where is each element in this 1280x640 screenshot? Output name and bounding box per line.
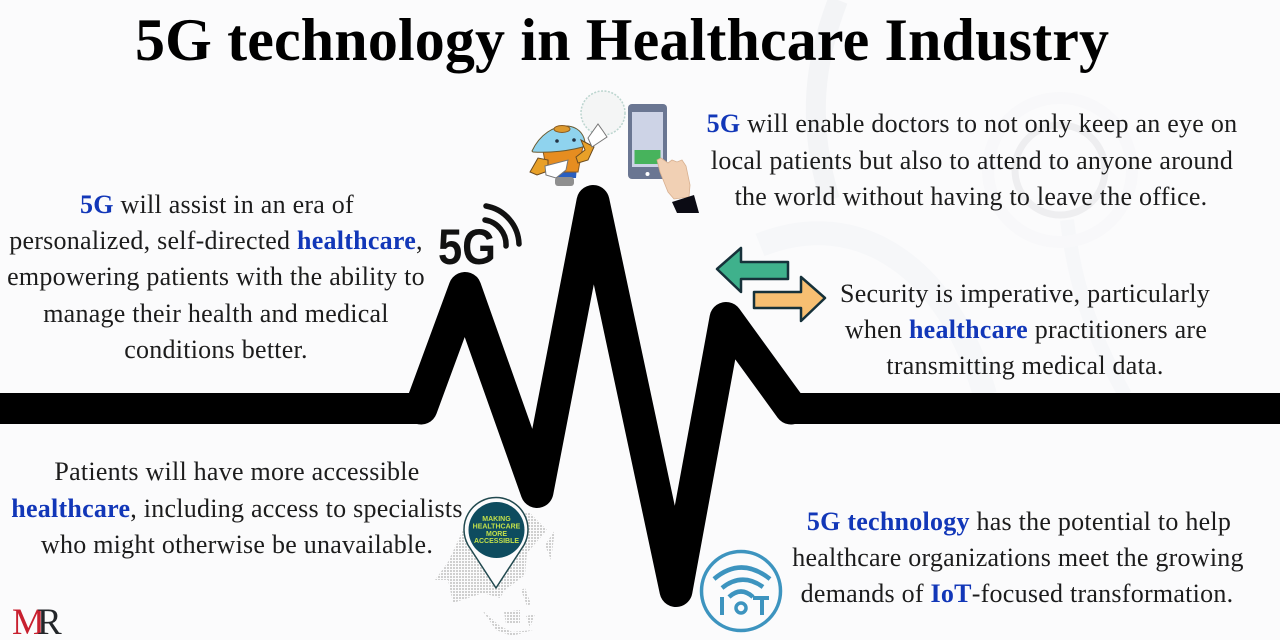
text block: security: when healthcare practitioners are: [845, 315, 1207, 344]
icon: dotted map of Asia: [435, 513, 555, 636]
icon: IoT: [702, 552, 780, 630]
text block: doctors: 5G will enable doctors to not only keep an eye on: [707, 109, 1237, 138]
text block: personalized healthcare: [7, 190, 425, 364]
text block: IoT: demands of IoT-focused transformation.: [801, 579, 1233, 608]
icon: 5G signal: 5G: [438, 219, 496, 275]
icon: location pin: [464, 498, 528, 588]
text block: doctors: the world without having to leave the office.: [735, 182, 1207, 211]
icon: location pin: ACCESSIBLE: [474, 538, 519, 545]
text block: IoT: 5G technology has the potential to help: [807, 507, 1231, 536]
icon: two exchange arrows: [717, 248, 825, 321]
text block: accessible healthcare: Patients will have more accessible: [54, 457, 420, 486]
text block: personalized healthcare: personalized, self-directed healthcare,: [9, 226, 423, 255]
text block: personalized healthcare: conditions better.: [124, 335, 308, 364]
text block: security: [840, 279, 1210, 380]
icon: location pin: HEALTHCARE: [473, 524, 521, 530]
text block: accessible healthcare: who might otherwise be unavailable.: [41, 530, 433, 559]
text block: personalized healthcare: manage their health and medical: [43, 299, 389, 328]
icon: location pin: MAKING: [482, 516, 511, 523]
icon: 5G signal: [438, 206, 519, 275]
text block: accessible healthcare: [11, 457, 463, 559]
text block: personalized healthcare: 5G will assist in an era of: [80, 190, 354, 219]
text block: accessible healthcare: healthcare, including access to specialists: [11, 494, 463, 523]
text block: security: Security is imperative, particularly: [840, 279, 1210, 308]
heartbeat pulse line: [0, 202, 1280, 590]
text block: doctors: local patients but also to attend to anyone around: [711, 146, 1233, 175]
text block: IoT: healthcare organizations meet the growing: [792, 543, 1244, 572]
icon: mascot tapping a circle: [530, 91, 625, 186]
icon: location pin: MORE: [486, 531, 507, 538]
title: 5G technology in Healthcare Industry: [135, 7, 1109, 73]
text block: security: transmitting medical data.: [886, 351, 1164, 380]
logo: MR: [12, 602, 62, 640]
text block: IoT: [792, 507, 1244, 608]
text block: personalized healthcare: empowering patients with the ability to: [7, 262, 425, 291]
text block: doctors: [707, 109, 1237, 211]
background: faint stethoscope: [760, 0, 1132, 395]
icon: phone and hand: [628, 104, 699, 213]
